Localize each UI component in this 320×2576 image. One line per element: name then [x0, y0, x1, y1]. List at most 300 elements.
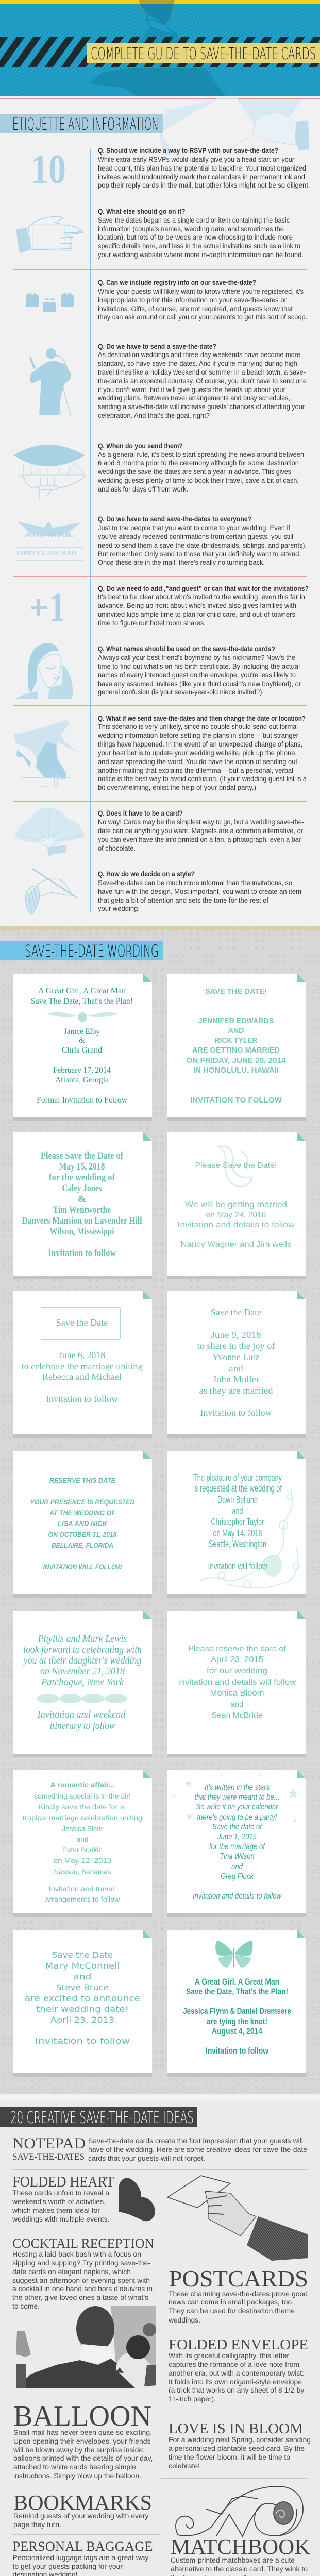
card: mary mcconnell: Save the Date: [52, 1950, 113, 1960]
card: jennifer edwards: JENNIFER EDWARDS: [198, 1016, 274, 1025]
card: romantic affair: [13, 1770, 152, 1917]
idea: folded envelope: (a trick that works on any sheet of 8 1/2-by-: [169, 2386, 307, 2394]
qa: and guest: It's best to be clear about who's invited to the wedding, even this far in: [98, 593, 305, 601]
card: a great girl serif: &: [79, 1036, 86, 1045]
idea: cocktail reception: suggest an afternoon or evening spent with: [12, 2277, 150, 2284]
card: caley jones: Please Save the Date of: [41, 1150, 124, 1161]
card: yvonne lutz: Yvonne Lutz: [212, 1352, 260, 1362]
icon: hand with pen: [25, 869, 77, 914]
card: romantic affair: and: [76, 1835, 89, 1843]
idea: balloon: Upon opening their envelopes, your friends: [13, 2437, 151, 2445]
idea: folded envelope: 11-inch paper).: [169, 2395, 216, 2403]
qa: rsvp: invitees would undoubtedly mark their calendars in permanent ink and: [98, 173, 305, 181]
card: romantic affair: Nassau, Bahamas: [54, 1868, 111, 1876]
card: monica bloom: and: [231, 1700, 243, 1709]
idea: matchbook: MATCHBOOK: [171, 2535, 310, 2558]
idea: balloon: Snail mail has never been quite so exciting.: [13, 2429, 152, 2436]
card: lisa and nick: BELLAIRE, FLORIDA: [52, 1541, 113, 1549]
card: phyllis and mark lewis: Phyllis and Mark Lewis: [38, 1633, 127, 1645]
heading: etiquette and information: ETIQUETTE AND INFORMATION: [12, 114, 159, 134]
card: romantic affair: A romantic affair...: [50, 1781, 114, 1789]
card: written in the stars: for the marriage of: [209, 1842, 265, 1851]
card: written in the stars: So write it on your calendar: [196, 1803, 278, 1811]
idea: personal baggage: Personalized luggage tags are a great way: [12, 2554, 149, 2562]
card: written in the stars: Save the date of: [212, 1823, 262, 1832]
illustration: flourish: [176, 2486, 303, 2537]
card: monica bloom: April 23, 2015: [211, 1655, 263, 1664]
qa: when to send: and ask for days off from work.: [98, 485, 188, 493]
card: phyllis and mark lewis: you at their daughter's wedding: [23, 1655, 142, 1666]
qa: change of date: [97, 715, 307, 791]
qa: and guest: time to figure out hotel room shares.: [98, 619, 206, 627]
card: jennifer edwards: [167, 974, 306, 1121]
qa: send to everyone: [98, 515, 307, 566]
card: rebecca and michael: Invitation to follow: [46, 1394, 118, 1404]
card: rebecca and michael: [13, 1291, 152, 1438]
black diagonal stripes: [0, 37, 320, 67]
card: written in the stars: there's going to be a party!: [197, 1813, 277, 1822]
card: written in the stars: Invitation and details to follow: [193, 1892, 282, 1901]
ornament: stars: ★: [184, 1811, 194, 1822]
icon: running woman: [14, 720, 78, 788]
card: written in the stars: June 1, 2015: [217, 1833, 257, 1841]
qa: a card: date can be anything you want. Magnets are a common alternative, or: [98, 827, 303, 835]
qa: do we have to send: the-date is an expected courtesy. Of course, you don't have to send one: [98, 377, 307, 385]
card: written in the stars: Greg Flock: [221, 1872, 254, 1881]
idea: bookmarks: [13, 2490, 152, 2529]
card: romantic affair: on May 12, 2015: [54, 1856, 111, 1865]
idea: balloon: attached to white cards bearing simple: [13, 2463, 136, 2471]
card: caley jones: Wilson, Mississippi: [49, 1226, 114, 1237]
qa: a card: you can even have the info printed on a fan, a photograph, even a bar: [98, 836, 301, 843]
qa: do we have to send: celebration. And that's the goal, right?: [98, 412, 210, 419]
qa: rsvp: pop their reply cards in the mail, but other folks might not be so diligent.: [98, 181, 310, 189]
ornament: scroll flourish: [46, 1012, 119, 1023]
heading: 20 creative ideas: [0, 2107, 197, 2127]
heading: etiquette and information: [0, 114, 163, 134]
qa: rsvp: Q. Should we include a way to RSVP with our save-the-date?: [98, 147, 278, 155]
card: yvonne lutz: John Muller: [213, 1374, 259, 1384]
qa: style: Save-the-dates can be much more informal than the invitations, so: [98, 879, 292, 887]
card: monica bloom: Sean McBride: [211, 1711, 263, 1720]
card: romantic affair: Peter Bodkin: [62, 1845, 103, 1854]
card: mary mcconnell: [13, 1930, 152, 2077]
idea: love is in bloom: LOVE IS IN BLOOM: [169, 2420, 303, 2437]
card: rebecca and michael: Save the Date: [56, 1317, 108, 1328]
card: a great girl serif: A Great Girl, A Great Man: [38, 987, 126, 995]
qa: style: that gets a bit of attention and sets the tone for the rest of: [98, 896, 268, 904]
idea: cocktail reception: COCKTAIL RECEPTION: [12, 2236, 154, 2251]
ornament: stars: ★: [287, 1786, 299, 1802]
card: monica bloom: Please reserve the date of: [188, 1645, 287, 1653]
qa: send to everyone: Q. Do we have to send save-the-dates to everyone?: [98, 515, 251, 523]
card: mary mcconnell: Mary McConnell: [45, 1961, 120, 1971]
card: jessica flynn: Invitation to follow: [206, 2046, 269, 2056]
icon: hand holding card: [16, 216, 83, 253]
qa: registry: they can ask around or call you or your parents to get this sort of scoop.: [98, 313, 307, 321]
qa: change of date: things have happened. In the event of an unexpected change of plans,: [98, 740, 302, 748]
qa: names: Q. What names should be used on the save-the-date cards?: [98, 645, 275, 653]
idea: postcards: They can be used for destination theme: [169, 2307, 295, 2315]
card: mary mcconnell: Steve Bruce: [56, 1982, 109, 1992]
idea: notepad: Save-the-date cards create the first impression that your guests will: [88, 2137, 303, 2145]
card: yvonne lutz: [167, 1291, 306, 1438]
idea: balloon: balloons printed with the details of your day,: [13, 2454, 153, 2462]
qa: change of date: and start spreading the word. You do have the option of sending out: [98, 758, 297, 766]
card: monica bloom: [167, 1611, 306, 1757]
icon: dancing couple: [29, 348, 71, 417]
card: phyllis and mark lewis: Patchogue, New York: [41, 1676, 124, 1688]
card: jessica flynn: Jessica Flynn & Daniel Dremsere: [183, 2006, 291, 2016]
qa: a card: Q. Does it have to be a card?: [98, 809, 183, 817]
card: caley jones: &: [78, 1194, 86, 1205]
card: jessica flynn: are tying the knot!: [207, 2016, 267, 2026]
ornament: corner swirl: [200, 1488, 299, 1588]
qa: a card: No way! Cards may be the simplest way to go, but a wedding save-the-: [98, 818, 304, 826]
qa: a card: [98, 809, 304, 852]
card: romantic affair: arrangements to follow: [45, 1895, 120, 1903]
heading: 20 creative ideas: 20 CREATIVE SAVE-THE-DATE IDEAS: [10, 2108, 194, 2127]
qa: registry: invitations. Gifts, of course, are not required, and guests know that: [98, 305, 293, 313]
card: mary mcconnell: their wedding date!: [36, 2004, 129, 2014]
qa: change of date: another mailing that explains the dilemma -- but a personal, verbal: [98, 767, 293, 774]
idea: bookmarks: BOOKMARKS: [13, 2490, 152, 2514]
idea: balloon: will be blown away by the surprise inside:: [13, 2446, 145, 2454]
idea: matchbook: alternative to the classic card. They wink to: [171, 2565, 308, 2573]
card: rebecca and michael: Rebecca and Michael: [42, 1371, 122, 1382]
qa: what else: [98, 208, 304, 259]
card: a great girl serif: February 17, 2014: [53, 1066, 111, 1075]
idea: notepad: SAVE-THE-DATES: [12, 2151, 85, 2162]
icon: air mail stamp: FIRST CLASS MAIL: [16, 549, 78, 557]
card: jennifer edwards: ARE GETTING MARRIED: [192, 1046, 280, 1055]
qa: rsvp: While extra-early RSVPs would ideally give you a head start on your: [98, 156, 294, 163]
qa: change of date: your best bet is to update your wedding website, pick up the phone,: [98, 749, 297, 757]
qa: when to send: wedding guests plenty of time to book their travel, save a bit of cash,: [97, 477, 299, 484]
qa: when to send: As a general rule, it's best to start spreading the news around between: [98, 451, 304, 459]
idea: cocktail reception: a cocktail in one hand and hors d'oeuvres in: [12, 2285, 153, 2293]
card: jennifer edwards: AND: [228, 1026, 244, 1035]
illustration: vintage woman: [90, 0, 226, 96]
qa: registry: While your guests will likely want to know where you're registered, it's: [98, 287, 304, 295]
qa: do we have to send: [97, 343, 307, 419]
idea: bookmarks: page they turn.: [13, 2521, 61, 2529]
card: yvonne lutz: and: [229, 1363, 243, 1374]
icon: thoughtful woman: [15, 643, 73, 699]
card: phyllis and mark lewis: itinerary to follow: [49, 1720, 115, 1732]
qa: change of date: bit overwhelming, enlist the help of your bridal party.): [98, 784, 256, 791]
card: nancy wagner: [167, 1132, 306, 1279]
ornament: stars: ★: [257, 1773, 261, 1778]
qa: what else: your wedding website where more in-depth information can be found.: [98, 251, 304, 259]
icon: airship: [13, 445, 86, 499]
qa: do we have to send: sending a save-the-date will increase guests' chances of attending your: [98, 403, 305, 411]
ornament: stars: ★: [293, 1819, 297, 1824]
idea: folded heart: FOLDED HEART: [12, 2174, 114, 2190]
qa: rsvp: [98, 147, 310, 189]
idea: balloon: BALLOON: [13, 2400, 151, 2432]
idea: folded heart: weekend's worth of activities,: [12, 2198, 106, 2206]
qa: when to send: weddings the save-the-dates are sent a year in advance. This gives: [97, 468, 291, 476]
idea: love is in bloom: celebrate!: [169, 2462, 200, 2470]
idea: postcards: These charming save-the-dates prove good: [169, 2290, 308, 2298]
card: written in the stars: [167, 1770, 306, 1917]
qa: names: time to find out what's on his birth certificate. By including the actual: [98, 663, 300, 670]
qa: registry: inappropriate to print this information on your save-the-dates or: [98, 296, 287, 304]
idea: love is in bloom: time the flower bloom, it will be time to: [169, 2453, 290, 2461]
idea: notepad: cards that your guests will not forget.: [88, 2155, 205, 2162]
card: yvonne lutz: Invitation to follow: [200, 1408, 272, 1418]
card: monica bloom: Monica Bloom: [210, 1689, 264, 1698]
panel: etiquette and information: [0, 99, 320, 926]
qa: names: Always call your best friend's boyfriend by his nickname? Now's the: [98, 654, 295, 662]
card: lisa and nick: INVITATION WILL FOLLOW: [43, 1563, 123, 1571]
qa: send to everyone: need to send them a save-the-date (bridesmaids, siblings, and parents).: [98, 541, 307, 549]
idea: cocktail reception: sipping and supping? Try printing save-the-: [12, 2259, 150, 2267]
idea: matchbook: [171, 2486, 310, 2576]
idea: bookmarks: Remind guests of your wedding with every: [13, 2512, 149, 2520]
idea: folded heart: [12, 2174, 155, 2223]
card: written in the stars: Tina Wilson: [220, 1852, 255, 1861]
qa: do we have to send: travel times like a holiday weekend or summer in a beach town, a save-: [98, 368, 306, 376]
card: nancy wagner: We will be getting married: [185, 1200, 287, 1209]
qa: when to send: Q. When do you send them?: [98, 442, 183, 450]
card: nancy wagner: Invitation and details to follow: [177, 1221, 295, 1229]
card: a great girl serif: Chris Grand: [62, 1046, 102, 1055]
idea: postcards: [167, 2176, 308, 2324]
card: mary mcconnell: April 23, 2013: [50, 2015, 114, 2025]
card: jennifer edwards: ON FRIDAY, JUNE 20, 2014: [187, 1056, 286, 1065]
idea: postcards: weddings.: [168, 2316, 200, 2324]
heading: save-the-date wording: [0, 941, 163, 961]
idea: cocktail reception: date cards on elegant napkins, which: [12, 2268, 131, 2276]
card: dawn bellane: Invitation will follow: [208, 1561, 267, 1571]
card: lisa and nick: RESERVE THIS DATE: [49, 1477, 116, 1484]
idea: cocktail reception: the other, give loved ones a taste of what's: [12, 2294, 148, 2301]
card: lisa and nick: YOUR PRESENCE IS REQUESTED: [30, 1498, 135, 1506]
qa: names: [98, 645, 301, 696]
card: a great girl serif: Atlanta, Georgia: [55, 1076, 109, 1084]
ornament: lace garland: [37, 1694, 127, 1703]
card: phyllis and mark lewis: on November 21, 2018: [40, 1666, 125, 1677]
card: caley jones: Tim Wentworthe: [53, 1205, 111, 1215]
qa: do we have to send: standard, so have save-the-dates. And if you're marrying during high-: [98, 360, 299, 367]
idea: love is in bloom: [169, 2420, 311, 2470]
qa: style: Q. How do we decide on a style?: [98, 870, 195, 878]
illustration: hand holding card: [167, 2176, 308, 2261]
qa: and guest: uninvited kids ample time to plan for child care, and out-of-towners: [98, 611, 295, 618]
icon: heart: [119, 2178, 155, 2221]
card: written in the stars: that they were meant to be...: [195, 1793, 279, 1802]
card: nancy wagner: Nancy Wagner and Jim wells: [180, 1240, 292, 1249]
idea: folded envelope: With its graceful calligraphy, this letter: [169, 2352, 290, 2360]
idea: balloon: [13, 2400, 153, 2480]
qa: change of date: wedding information before setting the plans in stone -- but stranger: [97, 732, 298, 739]
icon: air mail stamp: [15, 521, 83, 561]
card: jennifer edwards: IN HONOLULU, HAWAII: [193, 1066, 279, 1075]
idea: folded envelope: captures the romance of a love note from: [169, 2361, 299, 2368]
card: written in the stars: and: [231, 1862, 243, 1871]
card: jessica flynn: A Great Girl, A Great Man: [195, 1977, 279, 1987]
card: nancy wagner: on May 24, 2018: [206, 1211, 266, 1219]
card: dawn bellane: Seattle, Washington: [209, 1539, 266, 1549]
card: lisa and nick: ON OCTOBER 31, 2018: [48, 1531, 117, 1538]
header band: [0, 0, 320, 99]
idea: notepad: [12, 2135, 307, 2162]
card: jessica flynn: Save the Date, That's the Plan!: [186, 1987, 288, 1996]
card: lisa and nick: LISA AND NICK: [58, 1520, 108, 1528]
qa: names: names of every intended guest on the envelope, you're less likely to: [98, 671, 296, 679]
qa: do we have to send: if you don't want, but it will give guests the heads up about your: [98, 386, 285, 394]
icon: plus one: 1: [49, 585, 65, 630]
card: written in the stars: It's written in the stars: [205, 1783, 270, 1792]
card: mary mcconnell: and: [73, 1972, 92, 1981]
qa: do we have to send: wedding plans. Between travel arrangements and busy schedules,: [97, 394, 290, 402]
card: dawn bellane: on May 14, 2018: [213, 1528, 262, 1538]
idea: personal baggage: to get your guests packing for your: [12, 2563, 123, 2570]
card: a great girl serif: Formal Invitation to Follow: [37, 1096, 127, 1105]
icon: plus one: [31, 585, 65, 630]
card: phyllis and mark lewis: look forward to celebrating with: [23, 1644, 142, 1655]
qa: what else: Q. What else should go on it?: [98, 208, 186, 215]
card: nancy wagner: Please Save the Date!: [195, 1161, 277, 1170]
panel: save-the-date wording: [0, 926, 320, 2094]
qa: what else: specific details here, and less in the actual invitations such as a link to: [98, 242, 300, 250]
panel: 20 creative save-the-date ideas: [0, 2094, 320, 2576]
card: romantic affair: something special is in the air!: [34, 1792, 131, 1800]
ornament: stars: [172, 1773, 299, 1824]
qa: style: [98, 870, 301, 912]
card: phyllis and mark lewis: Invitation and weekend: [37, 1709, 126, 1720]
card: jessica flynn: [167, 1930, 306, 2077]
qa: send to everyone: Once these are in the mail, there's really no turning back.: [98, 558, 265, 566]
card: jennifer edwards: RICK TYLER: [214, 1036, 258, 1045]
qa: a card: of chocolate.: [98, 844, 136, 852]
card: jennifer edwards: SAVE THE DATE!: [205, 987, 267, 996]
card: jennifer edwards: INVITATION TO FOLLOW: [190, 1096, 282, 1105]
qa: what else: location), but lots of to-be-weds are now choosing to include more: [98, 233, 293, 241]
card: dawn bellane: Dawn Bellane: [217, 1495, 258, 1505]
icon: gift boxes: [26, 292, 74, 312]
idea: balloon: instructions. Simply blow up the balloon.: [13, 2472, 141, 2480]
idea: postcards: news can come in small packages, too.: [169, 2298, 294, 2306]
card: dawn bellane: [167, 1451, 306, 1598]
card: lisa and nick: AT THE WEDDING OF: [49, 1509, 116, 1517]
idea: folded heart: weddings with multiple events.: [12, 2215, 109, 2223]
idea: cocktail reception: to come.: [12, 2302, 40, 2310]
card: yvonne lutz: June 9, 2018: [211, 1330, 261, 1340]
card: caley jones: Danvers Mansion on Lavender Hill: [22, 1215, 142, 1226]
heading: save-the-date wording: SAVE-THE-DATE WORDING: [25, 941, 159, 961]
qa: and guest: advance. Being up front about who's invited also gives families with: [98, 602, 296, 609]
illustration: hand holding envelope: [159, 99, 309, 165]
card: caley jones: for the wedding of: [49, 1172, 115, 1183]
idea: notepad: have of the wedding. Here are some creative ideas for save-the-date: [88, 2146, 307, 2154]
qa: names: have any assumed invitees (like your third cousin's new boyfriend), or: [98, 680, 301, 688]
idea: folded envelope: It folds into its own origami-style envelope: [169, 2378, 302, 2386]
qa: what else: information (couple's names, wedding date, and sometimes the: [98, 225, 284, 233]
qa: change of date: notice is the best way to avoid confusion. (If your wedding guest list is a: [98, 775, 307, 783]
card: caley jones: Invitation to follow: [48, 1248, 116, 1259]
card: a great girl serif: [13, 974, 152, 1121]
card: romantic affair: Invitation and travel: [48, 1885, 114, 1893]
qa: and guest: [98, 585, 309, 627]
idea: love is in bloom: a personalized plantable seed card. By the: [169, 2445, 305, 2452]
idea: cocktail reception: [12, 2236, 156, 2388]
card: yvonne lutz: to share in the joy of: [197, 1341, 275, 1351]
card: romantic affair: Kindly save the date for a: [39, 1803, 124, 1811]
card: romantic affair: Jessica Slate: [62, 1824, 103, 1833]
idea: postcards: POSTCARDS: [169, 2265, 308, 2292]
card: rebecca and michael: June 6, 2018: [59, 1350, 105, 1360]
ornament: stars: ★: [172, 1794, 176, 1799]
card: mary mcconnell: are excited to announce: [25, 1993, 140, 2003]
qa: registry: [98, 279, 307, 321]
qa: style: your wedding.: [98, 905, 140, 912]
card: romantic affair: tropical marriage celebration uniting: [23, 1814, 142, 1822]
card: dawn bellane: Christopher Taylor: [211, 1517, 264, 1527]
icon: fan in hand: [14, 808, 85, 856]
card: yvonne lutz: as they are married: [199, 1385, 273, 1396]
qa: rsvp: head count, this plan has the potential to backfire. Your most organized: [98, 164, 306, 172]
card: yvonne lutz: Save the Date: [211, 1307, 261, 1317]
idea: matchbook: Custom-printed matchboxes are a cute: [171, 2556, 295, 2564]
qa: send to everyone: you've already received confirmations from certain guests, you still: [98, 533, 293, 540]
card: caley jones: Caley Jones: [62, 1183, 102, 1194]
card: caley jones: May 15, 2018: [59, 1161, 105, 1172]
ornament: stars: ★: [184, 1778, 193, 1789]
idea: cocktail reception: Hosting a laid-back bash with a focus on: [12, 2250, 141, 2258]
card: rebecca and michael: to celebrate the marriage uniting: [22, 1361, 142, 1371]
qa: when to send: 6 and 8 months prior to the ceremony although for some destination: [98, 459, 299, 467]
idea: folded envelope: another era, but with a contemporary twist:: [169, 2369, 304, 2377]
card: caley jones: [13, 1132, 152, 1279]
ornament: stars: ★: [219, 1773, 223, 1778]
qa: do we have to send: As destination weddings and three-day weekends have become more: [98, 351, 300, 359]
qa: registry: Q. Can we include registry info on our save-the-date?: [98, 279, 256, 286]
card: a great girl serif: Save The Date, That's the Plan!: [31, 997, 133, 1006]
qa: what else: Save-the-dates began as a single card or item containing the basic: [98, 216, 290, 224]
idea: personal baggage: PERSONAL BAGGAGE: [12, 2539, 153, 2554]
idea: folded envelope: [169, 2336, 308, 2403]
icon: butterfly: [215, 1941, 252, 1968]
idea: folded heart: These cards unfold to reveal a: [12, 2189, 110, 2197]
idea: folded envelope: FOLDED ENVELOPE: [169, 2336, 308, 2353]
card: dawn bellane: is requested at the wedding of: [193, 1483, 282, 1494]
card: mary mcconnell: Invitation to follow: [35, 2036, 130, 2046]
idea: notepad: NOTEPAD: [12, 2135, 86, 2152]
qa: style: have fun with the design. Most important, you want to create an item: [98, 888, 301, 895]
ornament: paisley: [218, 1146, 251, 1187]
idea: love is in bloom: For a wedding next Spring, consider sending: [169, 2436, 311, 2444]
qa: send to everyone: Just to the people that you want to come to your wedding. Even if: [98, 524, 290, 532]
card: lisa and nick: [13, 1451, 152, 1598]
card: phyllis and mark lewis: [13, 1611, 152, 1757]
idea: folded heart: which makes them ideal for: [12, 2207, 100, 2214]
qa: names: general confusion (is your seven-year-old niece invited?).: [98, 688, 264, 696]
qa: change of date: This scenario is very unlikely, since no couple should send out formal: [98, 723, 298, 731]
icon: number 10: 10: [31, 147, 66, 192]
card: dawn bellane: The pleasure of your company: [193, 1472, 282, 1483]
icon: air mail stamp: AIR MAIL: [24, 531, 75, 539]
card: monica bloom: for our wedding: [207, 1667, 267, 1675]
photo: couple at party: [16, 2306, 156, 2388]
card: jessica flynn: August 4, 2014: [212, 2026, 262, 2036]
card: monica bloom: invitation and details will follow: [178, 1678, 296, 1687]
qa: when to send: [97, 442, 304, 493]
idea: personal baggage: [12, 2539, 153, 2576]
qa: send to everyone: But remember: Only send to those that you definitely want to attend.: [98, 550, 301, 558]
